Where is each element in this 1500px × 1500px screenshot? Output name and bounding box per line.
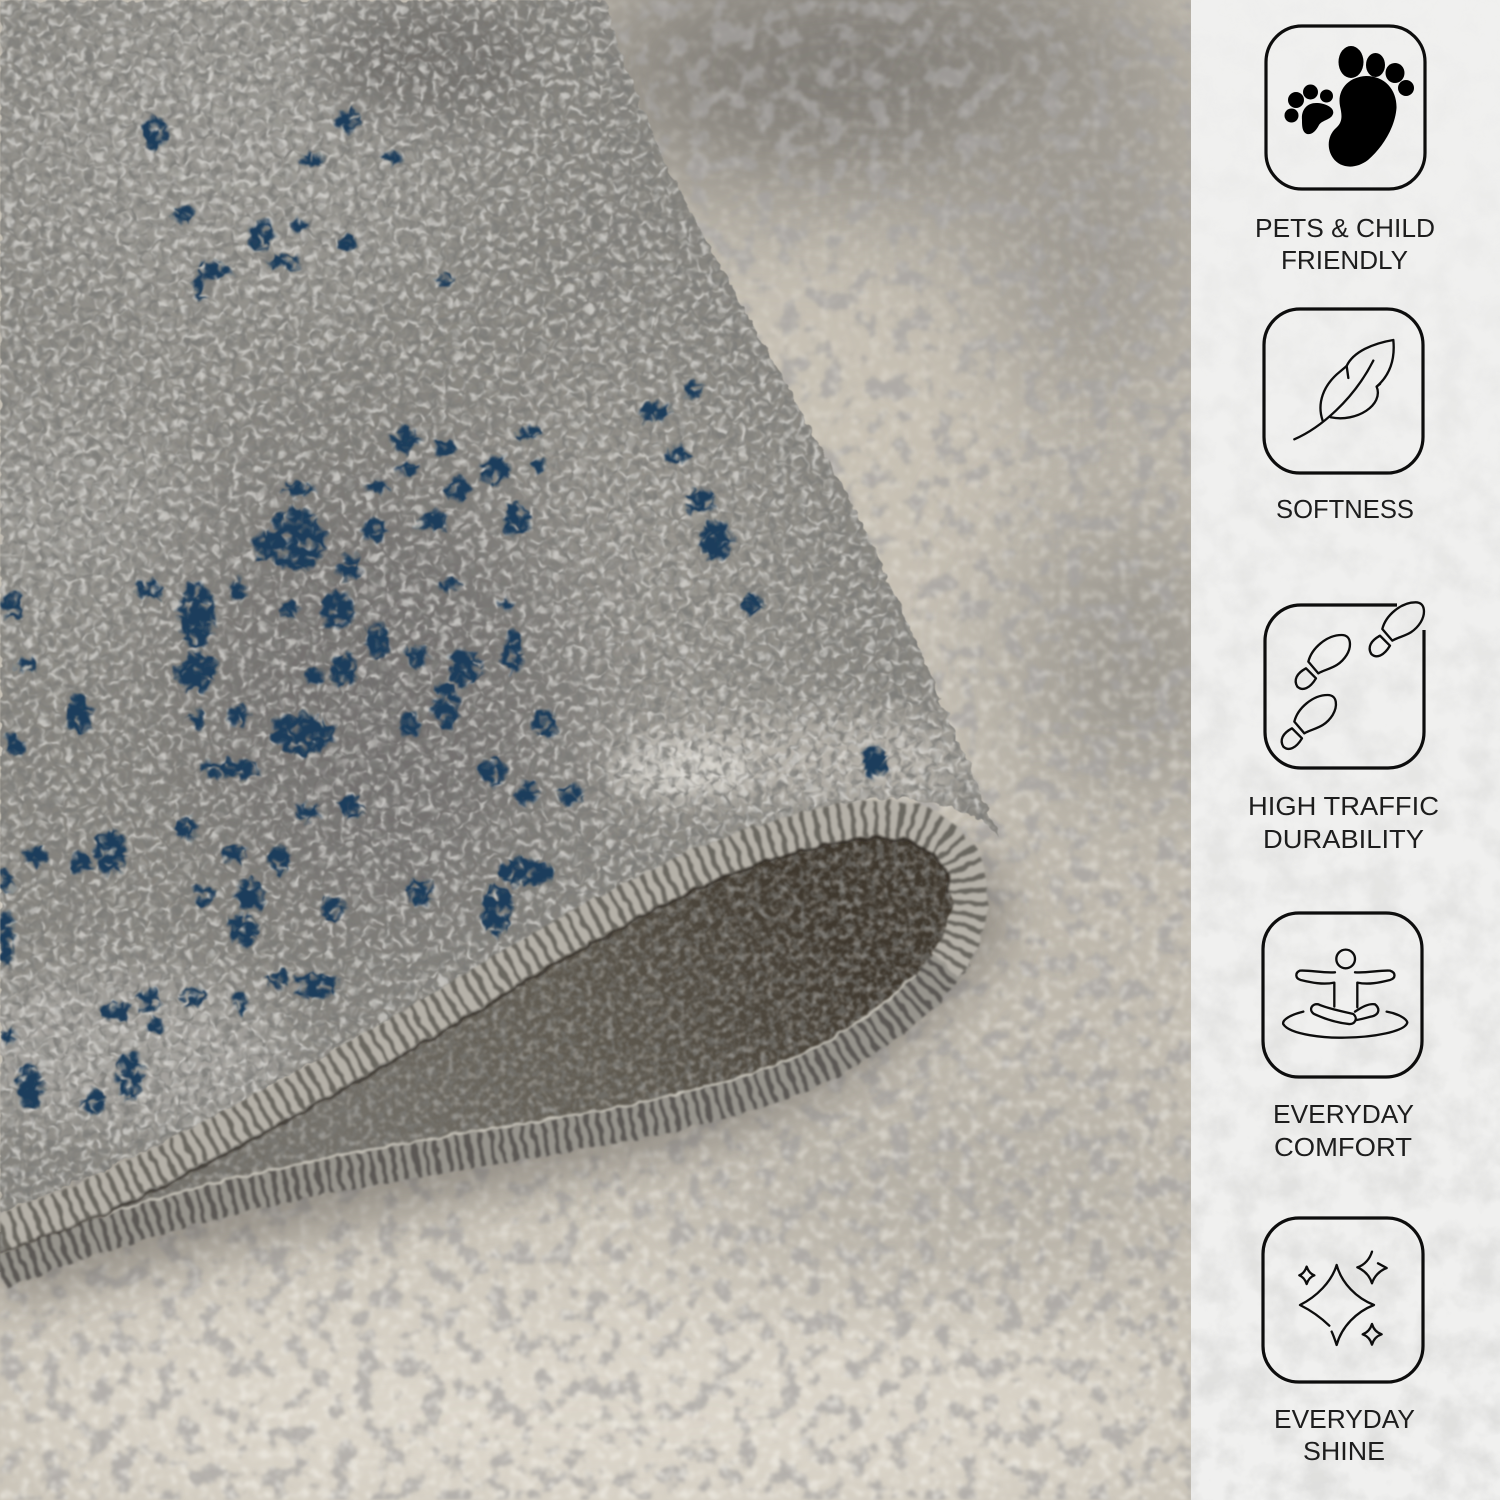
bound edge of rug	[0, 818, 970, 1252]
icon: baby foot and paw print	[1266, 26, 1425, 189]
blue speckles in rug pattern	[0, 109, 888, 1116]
label: shine: SHINE	[1303, 1436, 1385, 1466]
folded underside of rug	[0, 833, 955, 1272]
feature: high traffic durability	[1248, 602, 1439, 854]
label: durability: DURABILITY	[1263, 824, 1424, 854]
feature: everyday comfort	[1263, 913, 1422, 1162]
label: friendly: FRIENDLY	[1281, 245, 1408, 275]
label: high traffic: HIGH TRAFFIC	[1248, 791, 1439, 821]
hem band on underside	[0, 955, 955, 1272]
rug top surface	[0, 0, 1010, 1220]
icon: footprints	[1265, 602, 1424, 768]
label: everyday: EVERYDAY	[1274, 1404, 1415, 1434]
label: everyday: EVERYDAY	[1273, 1099, 1414, 1129]
icon: sparkles	[1263, 1218, 1423, 1382]
feature: softness	[1264, 309, 1423, 524]
label: softness: SOFTNESS	[1276, 494, 1414, 524]
panel: features sidebar	[1191, 0, 1500, 1500]
icon: feather	[1264, 309, 1423, 473]
background: rug photo floor	[0, 0, 1191, 1500]
icon: seated meditation figure	[1263, 913, 1422, 1077]
label: comfort: COMFORT	[1274, 1132, 1412, 1162]
feature: pets and child friendly	[1255, 26, 1435, 275]
feature: everyday shine	[1263, 1218, 1423, 1466]
shadow under rug fold	[0, 850, 1010, 1310]
label: pets and child friendly: PETS & CHILD	[1255, 213, 1435, 243]
